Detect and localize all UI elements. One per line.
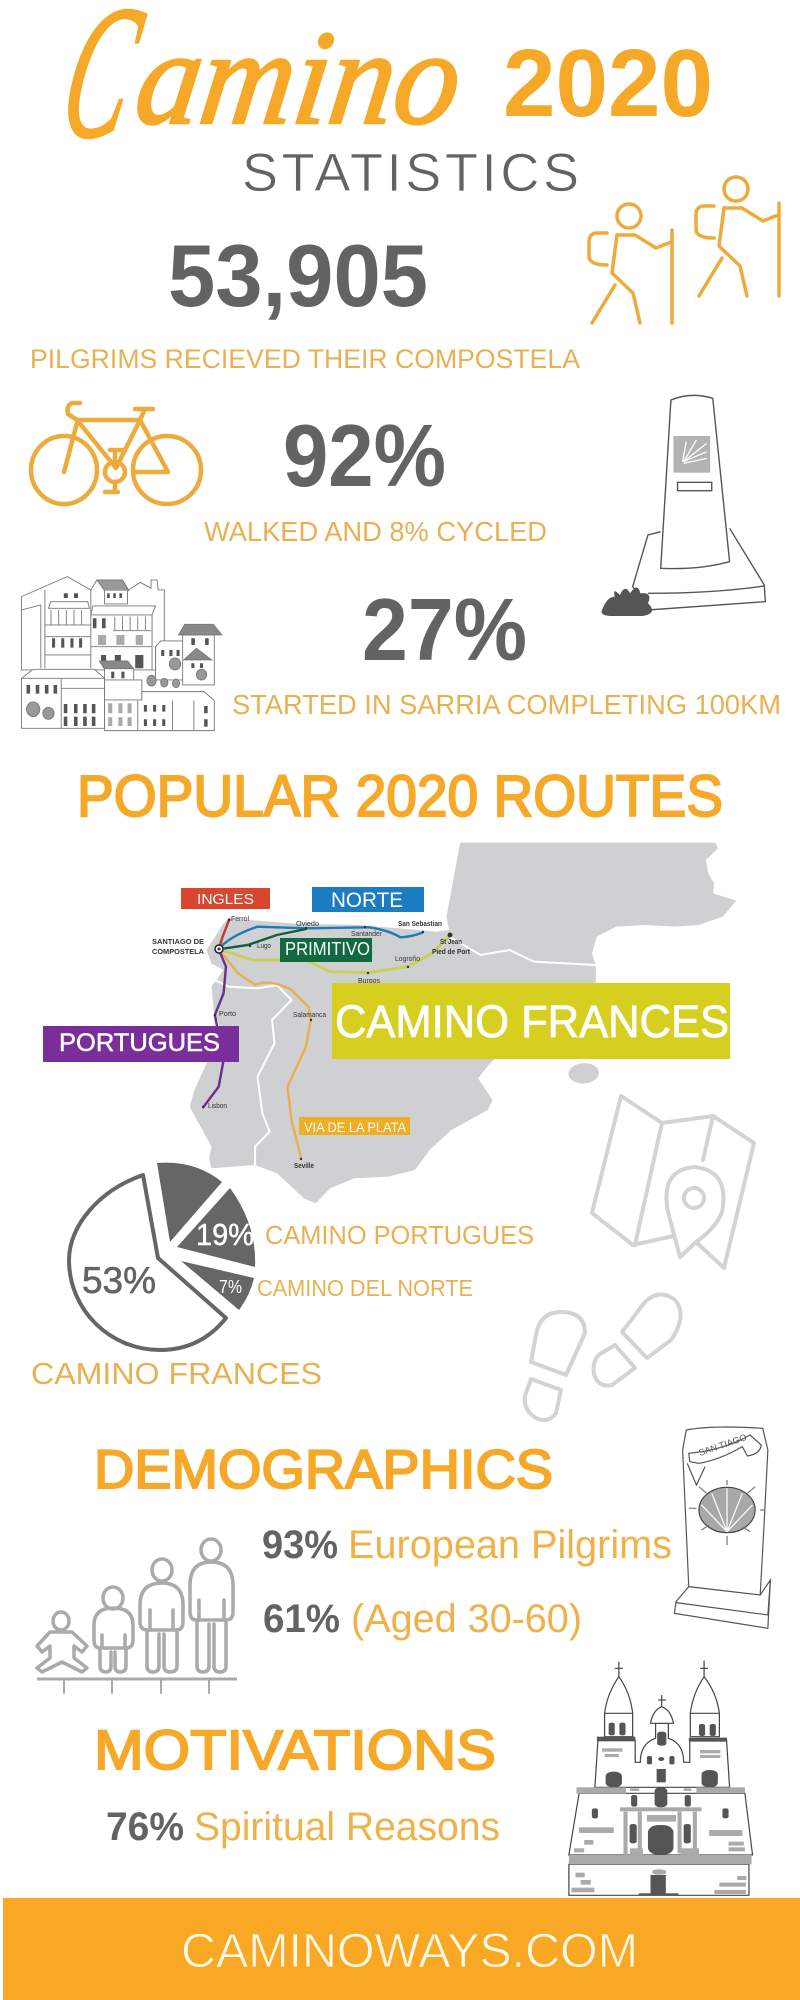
stat: spiritual reasons: Spiritual Reasons [194, 1805, 500, 1849]
stat: sarria: 27% [362, 580, 527, 679]
footer banner [3, 1898, 800, 2000]
slice: other [157, 1163, 222, 1242]
stat: sarria [232, 580, 781, 720]
label: via de la plata: VIA DE LA PLATA [304, 1120, 406, 1135]
icon: cathedral [569, 1661, 753, 1896]
label: portugues [43, 1026, 239, 1062]
stat: walked: 92% [283, 406, 446, 505]
label: primitivo: PRIMITIVO [285, 939, 370, 959]
map route lines [203, 919, 450, 1158]
stat: aged 30-60: (Aged 30-60) [351, 1597, 582, 1641]
stat: pilgrims: PILGRIMS RECIEVED THEIR COMPOSTELA [30, 344, 580, 374]
subtitle: STATISTICS [242, 143, 579, 203]
map place names: Burgos [358, 976, 380, 985]
label: portugues: PORTUGUES [59, 1029, 220, 1057]
map place names: Seville [294, 1161, 314, 1170]
label: ingles: INGLES [197, 891, 254, 908]
stat: european pilgrims: European Pilgrims [348, 1523, 672, 1567]
stat: european pilgrims: 93% [262, 1523, 338, 1567]
icon: milestone [602, 395, 765, 616]
map route dots [202, 919, 452, 1160]
map place names: COMPOSTELA [152, 947, 205, 956]
icon: folded map with pin [592, 1096, 754, 1268]
stone inscription: SAN TIAGO [697, 1432, 748, 1458]
map place names: Santander [351, 929, 382, 938]
icon: people growing [37, 1539, 237, 1693]
label: norte: NORTE [331, 889, 403, 912]
stone outline [674, 1427, 770, 1628]
stat: pilgrims [30, 226, 580, 374]
map place names [152, 914, 470, 1170]
pie label: camino frances: CAMINO FRANCES [31, 1356, 322, 1391]
pie label: camino portugues: CAMINO PORTUGUES [265, 1220, 534, 1250]
map place names: Logroño [395, 954, 420, 963]
map place names: San Sebastian [398, 919, 442, 928]
label: norte [312, 887, 424, 912]
map place names: Lugo [257, 941, 271, 950]
pie value: 19%: 19% [196, 1217, 254, 1252]
title [47, 0, 713, 178]
title: 2020 [503, 30, 713, 137]
map place names: St Jean [440, 937, 462, 946]
stat: walked: WALKED AND 8% CYCLED [204, 516, 547, 547]
pie chart: routes [69, 1163, 255, 1350]
icon: bicycle [31, 403, 201, 504]
map place names: Pied de Port [432, 947, 470, 956]
stat: aged 30-60: 61% [263, 1597, 340, 1641]
map: iberia routes [43, 843, 736, 1203]
stat: walked [204, 406, 547, 547]
map landmass [190, 843, 736, 1203]
label: camino frances [332, 983, 730, 1059]
stat: spiritual reasons: 76% [106, 1805, 184, 1849]
footer banner: CAMINOWAYS.COM [181, 1925, 638, 1978]
map place names: Lisbon [208, 1101, 227, 1110]
slice: portugues [177, 1188, 255, 1267]
title: amino [128, 4, 471, 153]
heading: motivations: MOTIVATIONS [94, 1718, 496, 1781]
slice: camino frances [69, 1175, 226, 1350]
icon: hikers [589, 177, 779, 323]
map place names: Porto [219, 1009, 236, 1018]
heading: demographics: DEMOGRAPHICS [94, 1438, 553, 1500]
icon: town [21, 577, 222, 731]
label: ingles [181, 888, 270, 909]
label: camino frances: CAMINO FRANCES [335, 996, 729, 1047]
stat: sarria: STARTED IN SARRIA COMPLETING 100KM [232, 689, 781, 720]
map place names: Oviedo [296, 919, 319, 928]
map place names: SANTIAGO DE [152, 937, 204, 946]
icon: footprints [525, 1294, 681, 1420]
stat: pilgrims: 53,905 [168, 226, 428, 325]
heading: popular routes: POPULAR 2020 ROUTES [77, 764, 723, 829]
pie value: 53%: 53% [82, 1260, 156, 1301]
map place names: Salamanca [293, 1010, 327, 1019]
icon: san tiago stone [674, 1427, 770, 1628]
slice: norte [181, 1261, 254, 1310]
pie label: camino del norte: CAMINO DEL NORTE [257, 1275, 473, 1301]
pie value: 7%: 7% [219, 1277, 242, 1297]
map place names: Ferrol [231, 914, 249, 923]
